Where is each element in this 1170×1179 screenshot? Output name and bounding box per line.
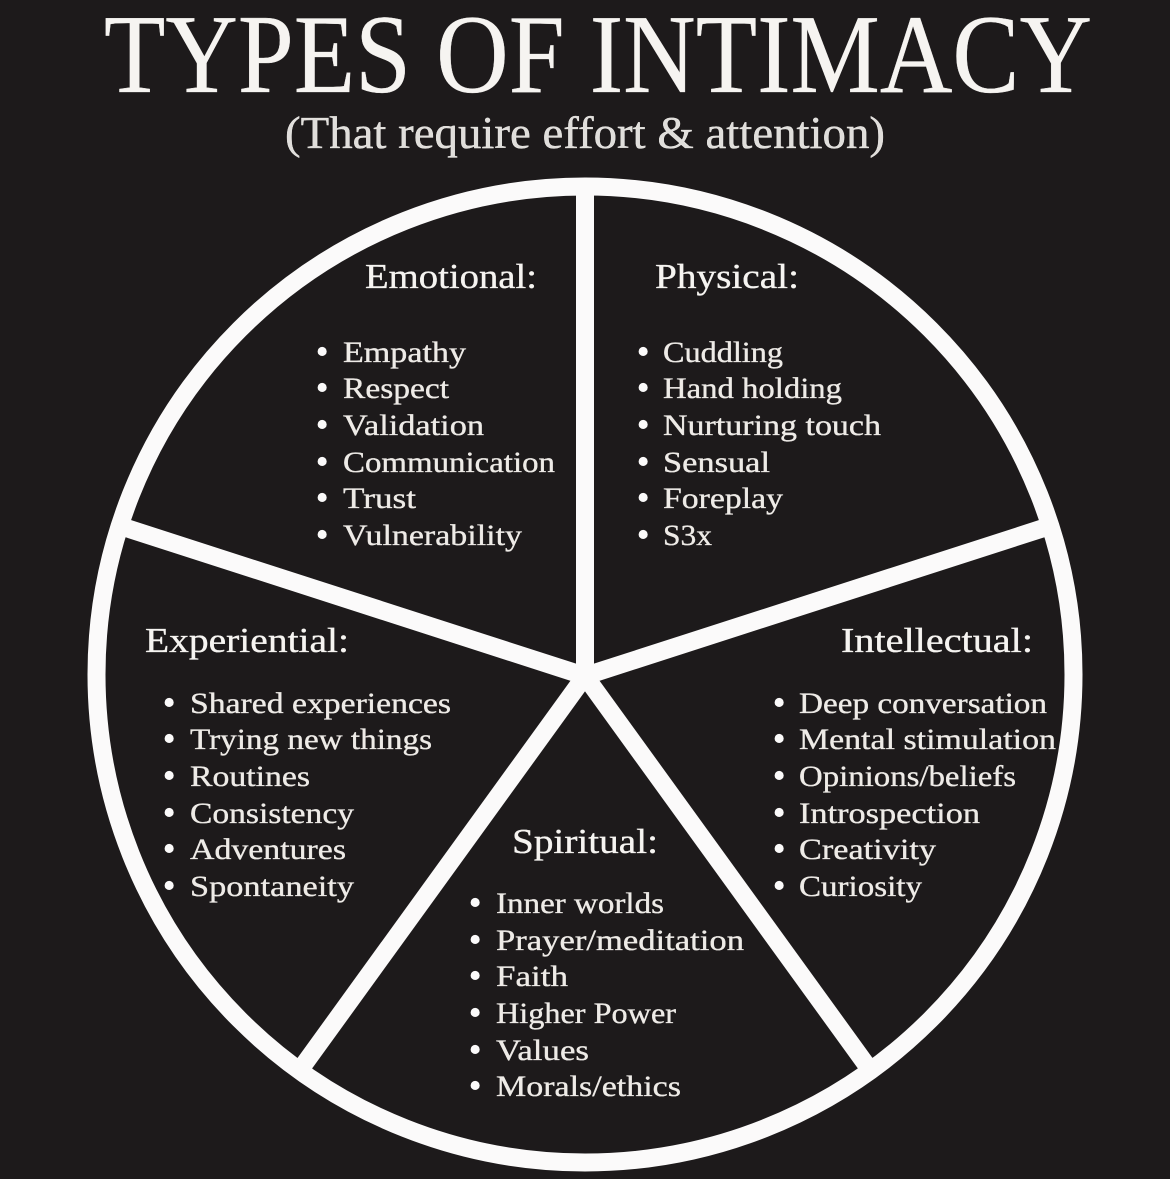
- panel: experiential: •: [162, 828, 176, 870]
- panel: physical: Hand holding: [663, 372, 842, 405]
- panel: spiritual: •: [468, 992, 482, 1034]
- panel: experiential: Consistency: [190, 797, 354, 830]
- panel: emotional: Empathy: [343, 336, 466, 369]
- panel: emotional: Communication: [343, 446, 555, 479]
- panel: emotional: •: [316, 404, 329, 446]
- panel: physical: •: [636, 331, 650, 373]
- pie chart wheel: [96, 186, 1074, 1162]
- panel: intellectual: •: [772, 755, 786, 797]
- panel: physical: •: [636, 514, 650, 556]
- panel: spiritual: •: [468, 882, 482, 924]
- panel: physical: Foreplay: [663, 482, 783, 515]
- panel: emotional: •: [316, 367, 329, 409]
- panel: experiential: Spontaneity: [190, 870, 354, 903]
- panel: intellectual: Creativity: [799, 833, 936, 866]
- panel: intellectual: Mental stimulation: [799, 723, 1056, 756]
- panel: physical: •: [636, 441, 650, 483]
- panel: experiential: Shared experiences: [190, 687, 451, 720]
- panel: intellectual: •: [772, 682, 786, 724]
- panel: spiritual: Spiritual:: [512, 822, 658, 861]
- panel: experiential: Experiential:: [145, 621, 349, 660]
- panel: experiential: •: [162, 865, 176, 907]
- panel: intellectual: Introspection: [799, 797, 980, 830]
- panel: physical: Cuddling: [663, 336, 783, 369]
- panel: experiential: •: [162, 755, 176, 797]
- panel: emotional: •: [316, 514, 329, 556]
- panel: intellectual: •: [772, 865, 786, 907]
- panel: emotional: [316, 257, 555, 556]
- panel: spiritual: Faith: [496, 960, 568, 993]
- panel: emotional: Trust: [343, 482, 417, 515]
- subtitle: (That require effort & attention): [285, 107, 885, 158]
- panel: spiritual: [468, 822, 744, 1107]
- panel: experiential: •: [162, 792, 176, 834]
- panel: physical: Sensual: [663, 446, 770, 479]
- panel: intellectual: Intellectual:: [841, 621, 1033, 660]
- panel: intellectual: •: [772, 792, 786, 834]
- panel: physical: •: [636, 404, 650, 446]
- panel: spiritual: Higher Power: [496, 997, 676, 1030]
- panel: emotional: •: [316, 477, 329, 519]
- panel: emotional: Validation: [343, 409, 484, 442]
- panel: intellectual: •: [772, 828, 786, 870]
- panel: physical: S3x: [663, 519, 712, 552]
- panel: physical: •: [636, 477, 650, 519]
- panel: spiritual: Values: [496, 1034, 589, 1067]
- panel: intellectual: [772, 621, 1056, 907]
- panel: spiritual: •: [468, 1029, 482, 1071]
- panel: intellectual: Curiosity: [799, 870, 922, 903]
- panel: spiritual: Morals/ethics: [496, 1070, 681, 1103]
- panel: experiential: Routines: [190, 760, 310, 793]
- panel: spiritual: •: [468, 1065, 482, 1107]
- panel: spiritual: Prayer/meditation: [496, 924, 744, 957]
- panel: spiritual: •: [468, 955, 482, 997]
- panel: physical: Physical:: [655, 257, 799, 296]
- panel: experiential: •: [162, 718, 176, 760]
- panel: physical: [636, 257, 881, 556]
- panel: physical: •: [636, 367, 650, 409]
- panel: intellectual: Opinions/beliefs: [799, 760, 1016, 793]
- panel: emotional: •: [316, 441, 329, 483]
- panel: spiritual: •: [468, 919, 482, 961]
- panel: experiential: Adventures: [190, 833, 346, 866]
- panel: intellectual: Deep conversation: [799, 687, 1047, 720]
- panel: experiential: Trying new things: [190, 723, 432, 756]
- panel: physical: Nurturing touch: [663, 409, 881, 442]
- panel: experiential: [145, 621, 451, 907]
- panel: spiritual: Inner worlds: [496, 887, 664, 920]
- panel: experiential: •: [162, 682, 176, 724]
- panel: emotional: Vulnerability: [343, 519, 522, 552]
- panel: emotional: Emotional:: [365, 257, 537, 296]
- panel: emotional: •: [316, 331, 329, 373]
- panel: intellectual: •: [772, 718, 786, 760]
- panel: emotional: Respect: [343, 372, 450, 405]
